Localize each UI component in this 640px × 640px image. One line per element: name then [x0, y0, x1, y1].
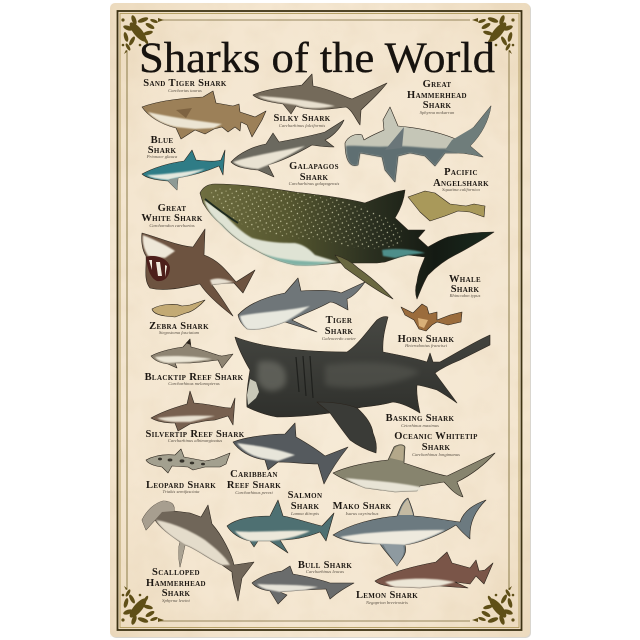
label: salmon shark: Salmon — [288, 490, 322, 501]
label: pacific angelshark — [433, 167, 489, 192]
label: bull shark: Bull Shark — [298, 560, 352, 571]
shark: mako — [333, 498, 486, 566]
label: zebra shark: Zebra Shark — [149, 321, 209, 332]
label: blue shark: Shark — [148, 145, 176, 156]
label: great hammerhead shark — [407, 79, 467, 115]
label: pacific angelshark: Pacific — [444, 167, 478, 178]
shark: lemon — [375, 552, 493, 588]
label: galapagos shark — [289, 161, 340, 186]
shark: horn — [401, 304, 462, 331]
label: sand tiger shark: Sand Tiger Shark — [143, 78, 227, 89]
label: scalloped hammerhead shark: Scalloped — [152, 567, 200, 578]
title: Sharks of the World — [139, 34, 495, 82]
label: oceanic whitetip shark: Carcharhinus longimanus — [412, 452, 460, 457]
shark: silvertip reef — [151, 391, 235, 431]
label: silvertip reef shark: Carcharhinus albimarginatus — [168, 438, 222, 443]
shark: blacktip reef — [151, 339, 233, 368]
shark: caribbean reef — [233, 423, 348, 484]
shark: bull — [252, 566, 354, 604]
label: tiger shark: Galeocerdo cuvier — [322, 336, 356, 341]
label: great hammerhead shark: Great — [423, 79, 451, 90]
label: silky shark: Carcharhinus falciformis — [279, 123, 325, 128]
label: leopard shark: Triakis semifasciata — [163, 489, 200, 494]
label: silky shark: Silky Shark — [273, 113, 331, 124]
label: horn shark: Heterodontus francisci — [404, 343, 448, 348]
label: basking shark: Cetorhinus maximus — [401, 423, 439, 428]
label: scalloped hammerhead shark: Hammerhead — [146, 578, 206, 589]
label: lemon shark: Lemon Shark — [356, 590, 418, 601]
label: salmon shark: Shark — [291, 501, 319, 512]
decorative frame — [118, 11, 522, 630]
label: blacktip reef shark: Carcharhinus melanopterus — [168, 381, 220, 386]
shark: sand tiger — [142, 91, 266, 139]
label: galapagos shark: Galapagos — [289, 161, 339, 172]
label: caribbean reef shark: Carcharhinus perezi — [235, 490, 273, 495]
label: galapagos shark: Shark — [300, 172, 328, 183]
label: silvertip reef shark: Silvertip Reef Shark — [145, 429, 245, 440]
label: great hammerhead shark: Sphyrna mokarran — [420, 110, 455, 115]
shark: tiger — [238, 278, 365, 332]
label: sand tiger shark: Carcharias taurus — [168, 88, 202, 93]
shark: salmon — [227, 500, 334, 553]
label: lemon shark: Negaprion brevirostris — [365, 600, 408, 605]
label: great white shark: White Shark — [141, 213, 203, 224]
label: great white shark: Carcharodon carcharias — [149, 223, 195, 228]
label: pacific angelshark: Angelshark — [433, 178, 489, 189]
label: scalloped hammerhead shark — [146, 567, 206, 603]
label: pacific angelshark: Squatina californica — [442, 187, 481, 192]
label: great hammerhead shark: Shark — [423, 100, 451, 111]
shark: galapagos — [231, 120, 344, 177]
label: salmon shark: Lamna ditropis — [290, 511, 319, 516]
label: blue shark: Blue — [151, 135, 173, 146]
label: caribbean reef shark: Reef Shark — [227, 480, 281, 491]
label: blue shark: Prionace glauca — [146, 154, 178, 159]
label: whale shark: Whale — [449, 274, 481, 285]
label: oceanic whitetip shark: Oceanic Whitetip — [394, 431, 478, 442]
label: horn shark: Horn Shark — [398, 334, 455, 345]
label: tiger shark — [322, 315, 356, 341]
shark: blue — [142, 150, 225, 190]
shark: basking — [235, 317, 490, 453]
shark: great hammerhead — [345, 106, 491, 182]
label: great white shark — [141, 203, 203, 228]
label: whale shark — [449, 274, 481, 298]
label: oceanic whitetip shark — [394, 431, 478, 457]
shark: pacific angelshark — [408, 191, 485, 221]
label: salmon shark — [288, 490, 322, 516]
shark: silky — [253, 74, 387, 125]
shark: oceanic whitetip — [333, 445, 495, 497]
shark: zebra — [152, 300, 205, 317]
label: blacktip reef shark: Blacktip Reef Shark — [145, 372, 244, 383]
corner ornament: bottom left — [121, 586, 164, 625]
shark: scalloped hammerhead — [142, 501, 254, 601]
label: scalloped hammerhead shark: Shark — [162, 588, 190, 599]
label: tiger shark: Shark — [325, 326, 353, 337]
label: zebra shark: Stegostoma fasciatum — [159, 330, 200, 335]
corner ornament: top left — [121, 15, 164, 54]
label: great white shark: Great — [158, 203, 186, 214]
label: leopard shark: Leopard Shark — [146, 480, 216, 491]
label: great hammerhead shark: Hammerhead — [407, 90, 467, 101]
label: tiger shark: Tiger — [326, 315, 353, 326]
label: bull shark: Carcharhinus leucas — [306, 569, 344, 574]
label: scalloped hammerhead shark: Sphyrna lewini — [162, 598, 191, 603]
label: whale shark: Shark — [451, 284, 479, 295]
label: mako shark: Mako Shark — [333, 501, 392, 512]
label: caribbean reef shark — [227, 469, 281, 495]
panel: vintage paper sign — [110, 3, 531, 638]
label: whale shark: Rhincodon typus — [449, 293, 481, 298]
shark: great white — [142, 229, 255, 316]
shark: leopard — [146, 449, 230, 473]
corner ornament: top right — [472, 15, 515, 54]
label: basking shark: Basking Shark — [386, 413, 455, 424]
label: mako shark: Isurus oxyrinchus — [345, 511, 379, 516]
shark: whale — [200, 184, 494, 299]
label: caribbean reef shark: Caribbean — [230, 469, 278, 480]
label: galapagos shark: Carcharhinus galapagensis — [289, 181, 340, 186]
label: oceanic whitetip shark: Shark — [422, 442, 450, 453]
label: blue shark — [146, 135, 178, 159]
corner ornament: bottom right — [472, 586, 515, 625]
